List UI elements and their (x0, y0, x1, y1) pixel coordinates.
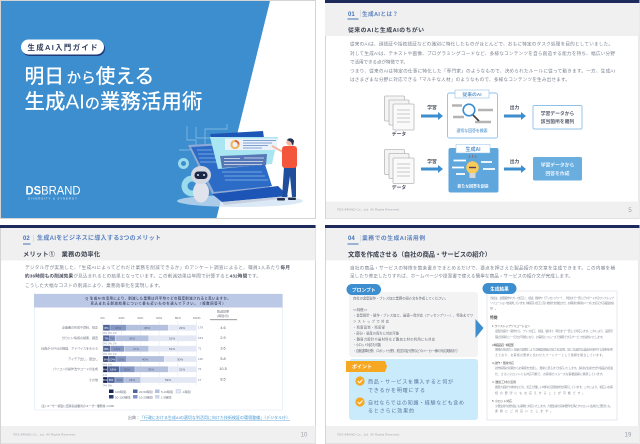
footer: 19 (625, 432, 632, 438)
footer: 5 (628, 208, 632, 214)
diagram row: conventional AI: 出力 (510, 104, 519, 111)
point box: るとさらに効果的 (368, 408, 414, 414)
survey chart (34, 294, 282, 410)
result box: 累積の技術力と最新の設備により高精度部品の加工を実現。常に高品質な製品を提供する体制を整 (495, 346, 613, 352)
result box: 様の要望にもお応えすることが可能です。 (495, 390, 585, 395)
sub-labels under bars: 0% 0% 1% (103, 331, 117, 335)
legend: -1時間 (182, 389, 191, 394)
bar values: 15% (114, 347, 120, 351)
body text (25, 264, 290, 289)
result box: 特徴 (490, 315, 498, 320)
result box: 柔軟にご対応いたします。 (495, 408, 553, 413)
result box: 5. 小ロット対応 (492, 398, 512, 403)
diagram row: conventional AI: データ (392, 130, 406, 138)
survey chart: Q 生成AIの活用により、削減した業務は月平均でどの程度削減されると思いますか。 (86, 296, 230, 300)
row labels: 企画書の作成や資料、校正 (62, 324, 98, 330)
conventional AI box (448, 90, 498, 138)
prompt box: ・自動運車分野、ロボット分野、航空宇宙分野などのメーカー様の対応実績あり (353, 348, 458, 353)
legend: 50-100時間 (115, 394, 130, 399)
survey chart: 見込まれる削減効果について最も近いものを選んで下さい。（複数回答可） (90, 300, 226, 306)
icon: data documents (384, 96, 414, 130)
body text: 対して生成AIは、テキストや画像、プログラミングコードなど、多様なコンテンツを自ら創造する能力を持ち、幅広い分野 (350, 50, 615, 57)
body text: 自社の商品・サービスの特徴を箇条書きでまとめるだけで、要点を押さえた製品紹介の文章を生成できます。この内容を補 (350, 264, 615, 272)
axis: 40% (137, 316, 144, 320)
brand logo: DIVERSITY & SYNERGY (28, 196, 77, 200)
cover title: 生成AIの業務活用術 (24, 90, 202, 114)
bar values: 36% (129, 336, 135, 340)
bar values: 51% (169, 347, 175, 351)
panel: slide 19 use case (325, 225, 640, 444)
result box: 1. ワンストップソリューション (492, 323, 530, 328)
prompt box: ・金型設計・製作・プレス加工、最適一貫対応（アッセンブリー）、特急までワ (353, 313, 473, 318)
diagram row: generative AI (384, 144, 582, 192)
legend: 100時間- (115, 389, 127, 394)
footer (326, 426, 639, 444)
row labels: パソコンの操作法やコードの生成 (53, 366, 98, 371)
source line: 出典：「行政における生成AIの適切な利活用に向けた技術検証の環境整備」（デジタル庁） (128, 415, 290, 420)
bar values: 12% (116, 378, 123, 382)
bar values: 45% (144, 326, 150, 330)
body text (350, 264, 615, 280)
bar values: 27% (133, 347, 139, 351)
body text: はさまざまな分野に対応できる「マルチな人材」のようなもので、多様なコンテンツを生み出せます。 (350, 76, 570, 83)
heading: 従来のAIと生成AIのちがい (348, 26, 424, 34)
section label (23, 234, 161, 244)
reduction values: 2.9 (220, 336, 226, 340)
cover title: 明日から使える (24, 66, 154, 88)
diagram row: generative AI: データ (392, 184, 406, 191)
axis: 100% (193, 316, 201, 320)
result box: 4. 難加工材の活用 (492, 379, 516, 384)
reduction values: 10.5 (219, 367, 227, 371)
row labels: その他 (89, 377, 98, 382)
icon: data documents (384, 150, 414, 184)
point ribbon: ポイント (352, 364, 372, 370)
point box: 商品・サービスを購入すると何が (368, 378, 453, 386)
survey chart: (注) ユーザー調査に回答協議業省のユーザー業務者 n=200 (41, 403, 114, 408)
brand logo: DSBRAND (26, 186, 80, 198)
body text (350, 40, 615, 83)
prompt box: ンストップで対応 (353, 319, 390, 324)
illustration: robot, laptop and person (177, 124, 303, 207)
icon: check 2 (355, 397, 365, 407)
body text: つまり、従来のAIは特定の仕事に特化した「専門家」のようなもので、決められたルールに従って動きます。一方、生成AI (350, 68, 615, 74)
arrow: learn (421, 112, 443, 120)
sub-labels under bars: 0% 1% (103, 362, 112, 366)
bar values: 35% (148, 368, 154, 372)
output box (533, 106, 582, 129)
generative AI box (448, 144, 498, 192)
prompt box (349, 292, 478, 357)
bar values: 10% (109, 357, 115, 361)
heading: 文章を作成させる（自社の商品・サービスの紹介） (348, 250, 491, 258)
axis: 20% (118, 316, 125, 320)
point box: 自社ならではの知識・経験なども含め (368, 400, 464, 406)
n column: 179 (198, 326, 203, 330)
reduction values: 5.8 (220, 357, 226, 361)
section label (348, 10, 398, 20)
bars (103, 325, 197, 383)
axis (101, 316, 201, 320)
result box: 3. 試作・量産対応 (492, 360, 514, 365)
bar values: 20% (124, 368, 130, 372)
gears (180, 160, 200, 194)
result box: 理の効率化と一元化が可能になり、お客様にスムーズで信頼できるサービスを提供いたします。 (495, 334, 605, 339)
bar values: 51% (169, 336, 175, 340)
result pill: 生成結果 (490, 286, 509, 292)
n column: 71 (198, 346, 202, 350)
result box: 供。 (490, 306, 498, 310)
axis: 0% (101, 316, 105, 320)
diagram row: generative AI: 学習 (427, 158, 437, 165)
generative AI box: 生成AI (465, 146, 481, 153)
sub-labels under bars: 1% (103, 373, 108, 377)
legend: 20-50時間 (139, 389, 153, 394)
arrow: prompt to result (476, 319, 484, 338)
output box: 該当箇所を羅列 (541, 118, 574, 125)
result box: 試作段階の初期からお客様を支援し、量産に至るまで対応いたします。多様な生産方式や製品の最適 (495, 365, 613, 370)
person (272, 138, 297, 200)
n column: 115 (198, 357, 203, 361)
footer: 10 (301, 432, 308, 438)
bar values: 16% (110, 368, 116, 372)
reduction values (219, 326, 227, 382)
result box: 当社は、金型製作やプレス加工に、最適、鉄材や（アッセンブリー）、特急まで一貫してサポートするワンストップ (490, 295, 614, 300)
row labels: 社員からFAQの相談、アドバイスをもらう (41, 346, 98, 350)
prompt box: ・小ロット対応も可能 (353, 342, 382, 347)
body text: デジタル庁が実施した、「生成AIによってどれだけ業務を削減できるか」のアンケート調査によると、職員1人あたり毎月 (25, 264, 290, 271)
bar values: 11% (118, 357, 124, 361)
bar values: 7% (104, 336, 109, 340)
output box: 回答を作成 (546, 170, 570, 177)
bar values: 31% (179, 368, 185, 372)
survey chart: (時間/月) (217, 313, 229, 318)
section label: 生成AIをビジネスに導入する3つのメリット (37, 234, 161, 242)
legend: 1-5時間 (161, 394, 171, 399)
output box: 学習データから (541, 162, 574, 168)
bar values: 18% (115, 326, 121, 330)
diagram row: generative AI: 出力 (510, 158, 519, 165)
conventional AI box: 適切な回答を検索 (456, 128, 488, 133)
icon: check 1 (355, 376, 365, 386)
output box (533, 157, 582, 180)
prompt pill (346, 284, 381, 295)
body text: 約36時間もの削減効果が見込まれるとの結果となっています。この削減効果は年間で計算すると432時間です。 (25, 272, 261, 280)
n column: 164 (198, 336, 203, 340)
result box: 2. 精度品質・精密部 (492, 342, 514, 347)
diagram row: conventional AI: 学習 (427, 104, 437, 111)
result box: 金型の設計・製作から、プレス加工、最適、組付け、特急まで一貫して対応します。これにより、品質管 (495, 328, 613, 333)
result box: 難易力設計や素材などの、加工が難しい材料の活用技術を保有しています。これにより、幅広いお客 (495, 384, 613, 389)
arrow: output (504, 165, 526, 173)
section label: 02 (23, 236, 30, 242)
prompt pill: プロンプト (352, 286, 376, 294)
row labels (41, 324, 98, 382)
footer (1, 426, 316, 444)
result box: ソリューションを提供しています。精度高い加工と高い技術力を融合させ、お客様の多様なニーズにお応えする製品を提 (490, 300, 614, 305)
sub-labels under bars: 0% 0% 1% (103, 342, 117, 346)
reduction values: 3.6 (220, 346, 226, 350)
diagram row: conventional AI (384, 90, 582, 138)
panel: cover slide (0, 0, 316, 218)
n column: 17 (198, 378, 202, 382)
result box: 少量生産や試作品にも柔軟に対応いたします。大量生産の基本要件を満たす小ロット生産のご要望にも、 (495, 403, 613, 408)
bar values: 6% (103, 368, 107, 372)
footer: ©DS BRAND Co., Ltd. All Rights Reserved. (13, 432, 76, 436)
body text: 足したり修正したりすれば、ホームページや提案書で使える簡単な商品・サービスの紹介文が完成します。 (350, 272, 573, 280)
prompt box: <<特徴>> (353, 307, 367, 312)
robot (191, 166, 211, 202)
axis: 60% (156, 316, 162, 320)
panel: slide 10 benefits (0, 225, 316, 444)
bar values: 59% (165, 378, 171, 382)
row labels: 分りにい情報の検索、調査 (62, 335, 98, 340)
body text: 従来のAIは、顔認証や指紋認証などの識別に特化したものがほとんどで、おもに特定のタスク処理を目的としていました。 (350, 40, 613, 48)
n column (198, 326, 203, 382)
footer (326, 202, 639, 218)
heading: メリット① 業務の効率化 (23, 250, 101, 258)
legend: 5-10時間 (161, 389, 173, 394)
bar values: 8% (104, 326, 109, 330)
result box: 化、さらに小ロットにも対応可能で、お客様のスムーズな事業展開に貢献しています。 (495, 371, 605, 376)
bar values: 6% (103, 378, 107, 382)
generative AI box: 新たな回答を創造 (457, 184, 489, 188)
bar values (103, 326, 185, 382)
bar values: 8% (104, 347, 109, 351)
footer: ©DS BRAND Co., Ltd. All Rights Reserved. (337, 432, 400, 436)
bar values: 7% (110, 336, 114, 340)
result box: えており、お客様の要求に合わせたパートナーとして信頼を確立しています。 (495, 352, 605, 357)
result box (487, 291, 617, 420)
panel: slide 5 what is generative AI (325, 0, 640, 218)
bar values: 8% (109, 378, 113, 382)
sub-labels under bars: 0% 0% (103, 384, 112, 388)
output box: 学習データから (541, 110, 574, 117)
arrow: learn (421, 165, 443, 173)
cover badge (21, 40, 105, 56)
arrow: output (504, 112, 526, 120)
n column: 72 (198, 367, 202, 371)
point box: できるかを明確にする (368, 387, 425, 394)
bar values: 29% (179, 326, 185, 330)
prompt box: ・精度品質・精密部 (353, 325, 386, 330)
row labels: アイデア出し、壁出し (68, 356, 98, 361)
legend: 10-20時間 (139, 394, 153, 399)
section label: 04 (348, 236, 355, 242)
bar values: 40% (142, 357, 148, 361)
prompt box: 自社の金型製作・プレス加工業務の紹介文を作成してください。 (353, 296, 448, 300)
prompt box: ・難易力設計や最材料など難加工材の利用にも対応 (353, 336, 436, 341)
body text: こうした大幅なコストの削減により、業務効率化を実現します。 (25, 282, 163, 289)
reduction values: 4.6 (220, 326, 226, 330)
section label: 生成AIとは？ (362, 10, 398, 18)
survey chart: 削減効果 (217, 308, 229, 314)
conventional AI box: 従来のAI (462, 91, 482, 98)
footer: ©DS BRAND Co., Ltd. All Rights Reserved. (337, 208, 400, 212)
cover title (24, 66, 202, 114)
point box (346, 359, 478, 420)
legend (109, 389, 191, 399)
section label (348, 234, 425, 244)
result pill (482, 283, 516, 294)
axis: 80% (175, 316, 181, 320)
body text: で活用できる点が特徴です。 (350, 58, 408, 66)
sub-labels under bars: 0% 0% 1% (103, 352, 117, 356)
section label: 01 (348, 12, 355, 18)
section label: 業務での生成AI活用例 (362, 234, 425, 242)
bar values: 30% (177, 357, 183, 361)
cover badge: 生成AI入門ガイド (28, 43, 98, 52)
sub-labels under bars (103, 331, 117, 388)
prompt box: ・部分・量産の両方に対応可能 (353, 330, 400, 335)
bar values: 18% (129, 378, 135, 382)
reduction values: 8.5 (220, 378, 226, 382)
bar values: 6% (104, 357, 108, 361)
